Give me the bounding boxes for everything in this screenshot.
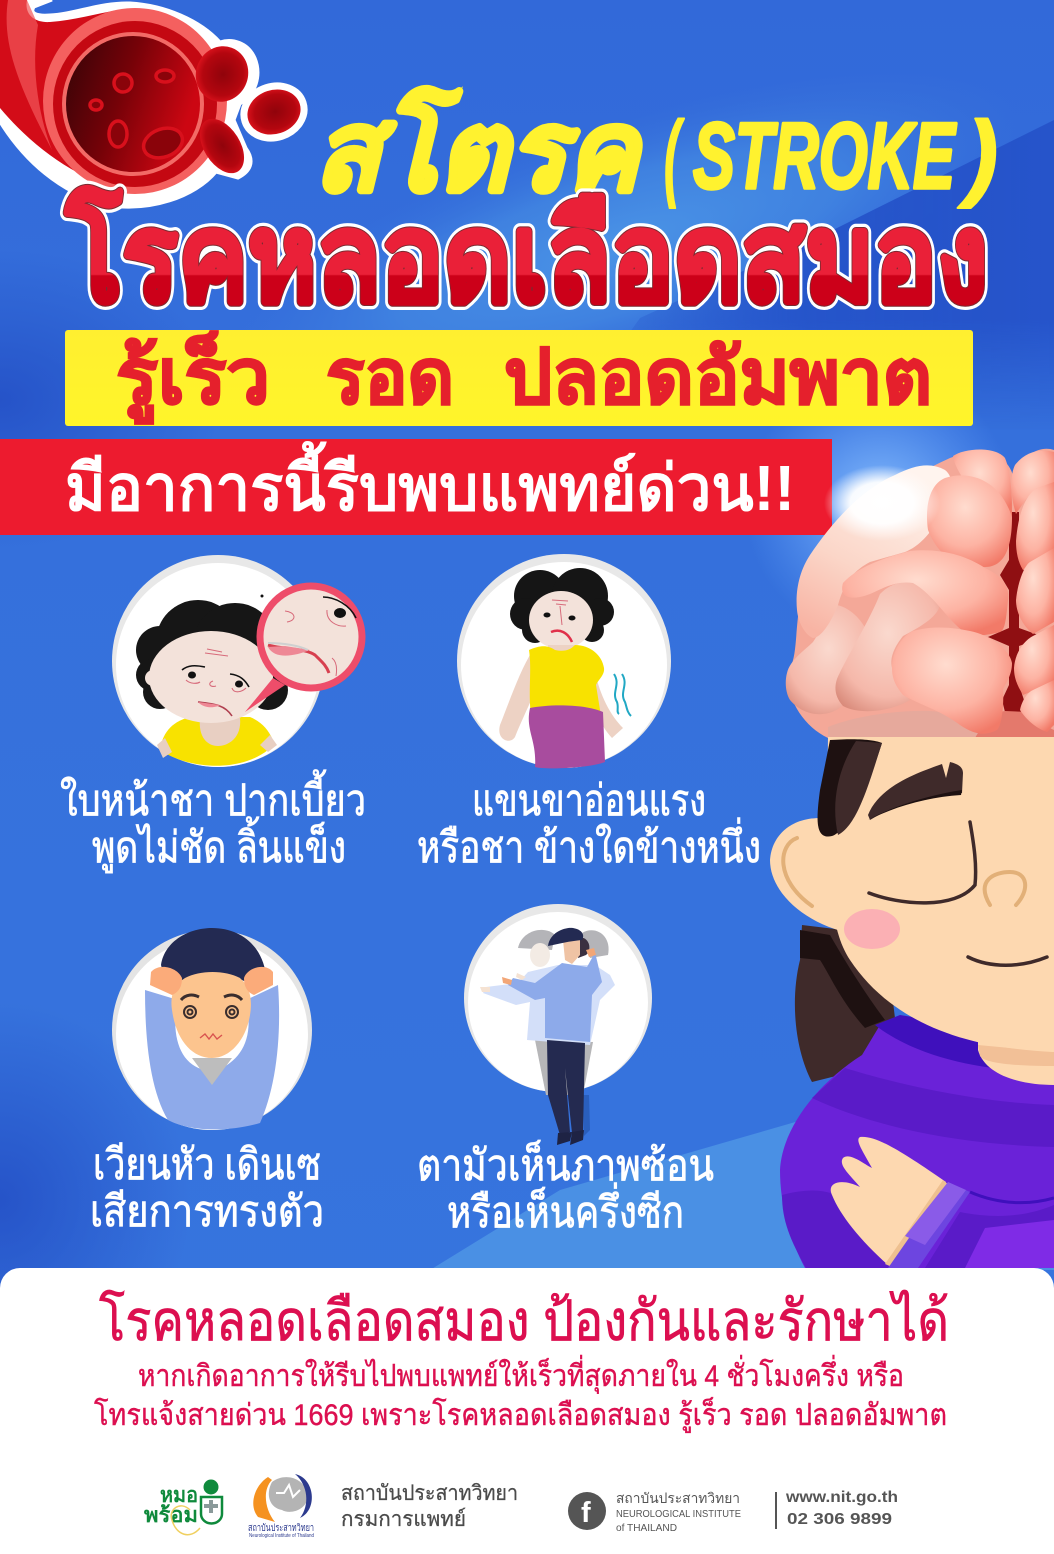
cheek [844, 909, 900, 949]
panel: symptom weak limbs [457, 554, 671, 768]
back hair [795, 925, 900, 1082]
illustration: character with exposed brain [770, 449, 1054, 1268]
face [149, 631, 273, 723]
logo: neurological institute: สถาบันประสาทวิทยา [248, 1523, 314, 1534]
label: blurred vision: หรือเห็นครึ่งซีก [447, 1183, 684, 1237]
icon: facebook [568, 1492, 606, 1530]
icon: facebook: f [581, 1497, 591, 1529]
hair [136, 600, 288, 710]
icon: blood vessel with cells [0, 0, 306, 207]
label: face numbness: พูดไม่ชัด ลิ้นแข็ง [92, 816, 346, 874]
banner: red urgent notice: มีอาการนี้รีบพบแพทย์ด่วน!! [65, 441, 795, 524]
magnifier [245, 678, 285, 712]
text: facebook page: of THAILAND [616, 1523, 677, 1534]
brain [786, 449, 1054, 738]
text: contact website and phone: www.nit.go.th [785, 1489, 898, 1506]
text: facebook page [616, 1490, 741, 1534]
label: dizziness: เสียการทรงตัว [90, 1188, 324, 1236]
panel: symptom numb face [112, 555, 362, 767]
text: institute name: กรมการแพทย์ [341, 1507, 466, 1531]
ear [770, 818, 860, 935]
label: blurred vision: ตามัวเห็นภาพซ้อน [417, 1140, 714, 1190]
text: institute name [341, 1482, 518, 1531]
label: weak limbs: หรือชา ข้างใดข้างหนึ่ง [417, 818, 761, 872]
label: weak limbs: แขนขาอ่อนแรง [472, 777, 706, 825]
main figure [508, 952, 602, 1042]
text: facebook page: NEUROLOGICAL INSTITUTE [616, 1509, 741, 1520]
title: stroke in Thai and English [314, 86, 998, 214]
banner: yellow slogan: รอด [326, 335, 454, 420]
banner: red urgent notice [0, 439, 832, 535]
shirt [160, 717, 272, 766]
logo: neurological institute: Neurological Institute of Thailand [249, 1533, 314, 1539]
label: face numbness: ใบหน้าชา ปากเบี้ยว [60, 769, 366, 825]
panel: prevention message [0, 1268, 1054, 1554]
logo: doctor ready: พร้อม [144, 1503, 198, 1527]
logo: doctor ready [144, 1480, 222, 1535]
advice text: หากเกิดอาการให้รีบไปพบแพทย์ให้เร็วที่สุดภายใน 4 ชั่วโมงครึ่ง หรือ [138, 1355, 904, 1395]
logo: neurological institute [248, 1474, 314, 1539]
text: facebook page: สถาบันประสาทวิทยา [616, 1490, 740, 1506]
eyebrow [868, 762, 963, 820]
label: dizziness [90, 1141, 324, 1236]
hand and cuff [831, 1137, 946, 1265]
text: contact website and phone: 02 306 9899 [787, 1511, 892, 1528]
label: face numbness [60, 769, 366, 874]
logo: doctor ready: หมอ [160, 1484, 198, 1507]
ghost figures [480, 930, 615, 1095]
head [828, 737, 1054, 1052]
advice text [94, 1355, 947, 1433]
banner: yellow slogan: รู้เร็ว [116, 331, 270, 424]
hair fringe [818, 739, 882, 837]
advice text: โทรแจ้งสายด่วน 1669 เพราะโรคหลอดเลือดสมอง รู้เร็ว รอด ปลอดอัมพาต [94, 1396, 947, 1433]
label: dizziness: เวียนหัว เดินเซ [93, 1141, 321, 1189]
banner: yellow slogan [65, 330, 973, 426]
sweater body [780, 1025, 1054, 1268]
title: stroke in Thai and English: ( [664, 102, 685, 209]
panel: symptom blurred vision [464, 904, 652, 1145]
label: weak limbs [417, 777, 761, 872]
head shadow on sweater [875, 1015, 1054, 1072]
eye, nose, mouth [783, 822, 1047, 965]
neck [978, 1040, 1054, 1085]
title: stroke in Thai and English: ) [957, 102, 998, 209]
title: stroke in Thai and English: สโตรค [314, 86, 643, 214]
panel: symptom dizziness [112, 928, 312, 1130]
text: contact website and phone [775, 1489, 898, 1529]
banner: yellow slogan: ปลอดอัมพาต [504, 335, 932, 420]
heading: preventable and treatable: โรคหลอดเลือดสมอง ป้องกันและรักษาได้ [99, 1289, 949, 1352]
text: institute name: สถาบันประสาทวิทยา [341, 1482, 518, 1505]
label: blurred vision [417, 1140, 714, 1237]
